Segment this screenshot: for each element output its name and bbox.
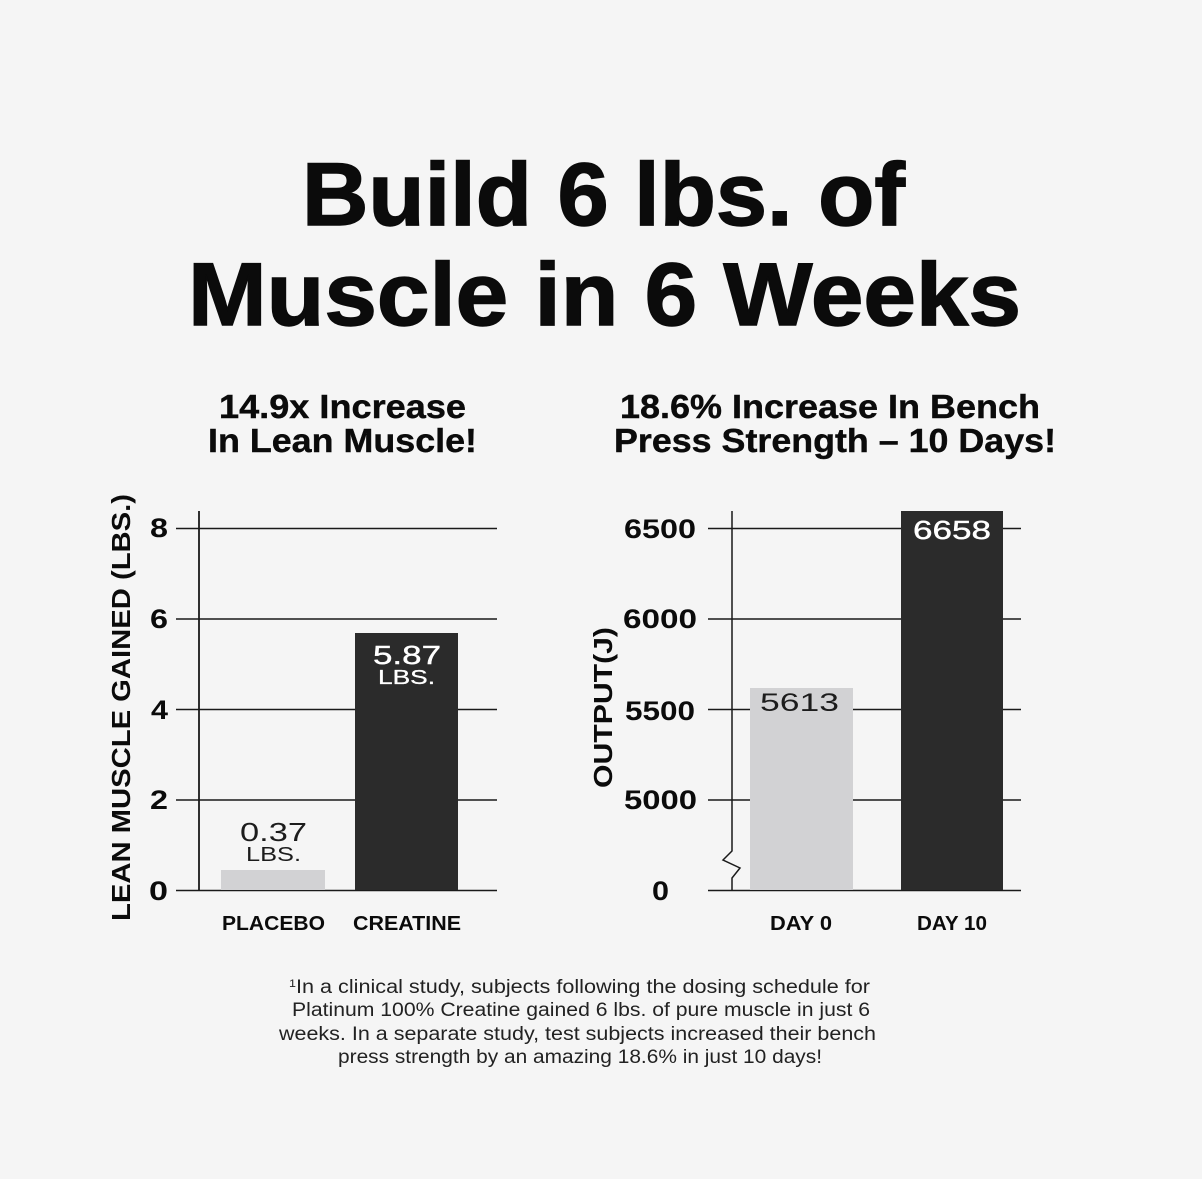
value: 0.37 lbs: 0.37 xyxy=(240,817,307,847)
heading: lean muscle: In Lean Muscle! xyxy=(208,422,477,459)
y axis tick labels: 0 xyxy=(149,876,168,906)
value: 5.87 lbs: 5.87 xyxy=(373,640,441,670)
y axis tick labels xyxy=(623,514,697,906)
value: 5613: 5613 xyxy=(760,689,839,717)
footnote: 1 xyxy=(289,978,296,990)
x labels: day 0 and day 10: DAY 0 xyxy=(770,913,832,935)
y axis tick labels: 6000 xyxy=(623,604,697,634)
y axis tick labels: 0 xyxy=(652,876,669,906)
heading: bench press: Press Strength – 10 Days! xyxy=(614,422,1056,459)
x labels: day 0 and day 10 xyxy=(770,913,987,935)
bar: day 0 xyxy=(750,688,853,890)
y axis tick labels: 8 xyxy=(150,513,168,543)
title xyxy=(188,144,1021,344)
title: Build 6 lbs. of xyxy=(302,144,905,244)
y axis title: output: OUTPUT(J) xyxy=(588,627,618,788)
footnote: In a clinical study, subjects following the dosing schedule for xyxy=(296,977,871,998)
value: 0.37 lbs: LBS. xyxy=(246,844,301,866)
footnote: weeks. In a separate study, test subjects increased their bench xyxy=(278,1024,876,1045)
grid lines and axes xyxy=(176,511,497,890)
value: 0.37 lbs xyxy=(240,817,307,866)
footnote: press strength by an amazing 18.6% in just 10 days! xyxy=(338,1047,822,1068)
heading: bench press xyxy=(614,388,1056,459)
grid lines and broken axis xyxy=(708,511,1021,890)
title: Muscle in 6 Weeks xyxy=(188,244,1021,344)
bar: creatine xyxy=(355,633,458,890)
y axis tick labels: 4 xyxy=(151,695,168,725)
y axis tick labels: 5500 xyxy=(625,696,695,726)
panel: bench press chart xyxy=(588,388,1056,935)
heading: lean muscle xyxy=(208,388,477,459)
bar: day 10 xyxy=(901,511,1003,890)
heading: bench press: 18.6% Increase In Bench xyxy=(620,388,1040,425)
footnote xyxy=(278,977,876,1068)
bar: placebo xyxy=(221,870,325,890)
x labels: placebo and creatine: CREATINE xyxy=(353,913,461,935)
x labels: day 0 and day 10: DAY 10 xyxy=(917,913,987,935)
y axis tick labels: 5000 xyxy=(624,785,697,815)
x labels: placebo and creatine: PLACEBO xyxy=(222,913,325,935)
y axis title: lean muscle gained: LEAN MUSCLE GAINED (LBS.) xyxy=(106,494,136,921)
panel: lean muscle chart xyxy=(106,388,497,935)
value: 5.87 lbs xyxy=(373,640,441,689)
y axis tick labels: 6 xyxy=(150,604,168,634)
value: 5.87 lbs: LBS. xyxy=(378,667,435,689)
y axis tick labels: 2 xyxy=(150,785,168,815)
y axis tick labels: 6500 xyxy=(624,514,696,544)
y axis tick labels xyxy=(149,513,168,906)
footnote: Platinum 100% Creatine gained 6 lbs. of pure muscle in just 6 xyxy=(292,1000,870,1021)
value: 6658: 6658 xyxy=(913,515,991,545)
heading: lean muscle: 14.9x Increase xyxy=(219,388,466,425)
x labels: placebo and creatine xyxy=(222,913,461,935)
